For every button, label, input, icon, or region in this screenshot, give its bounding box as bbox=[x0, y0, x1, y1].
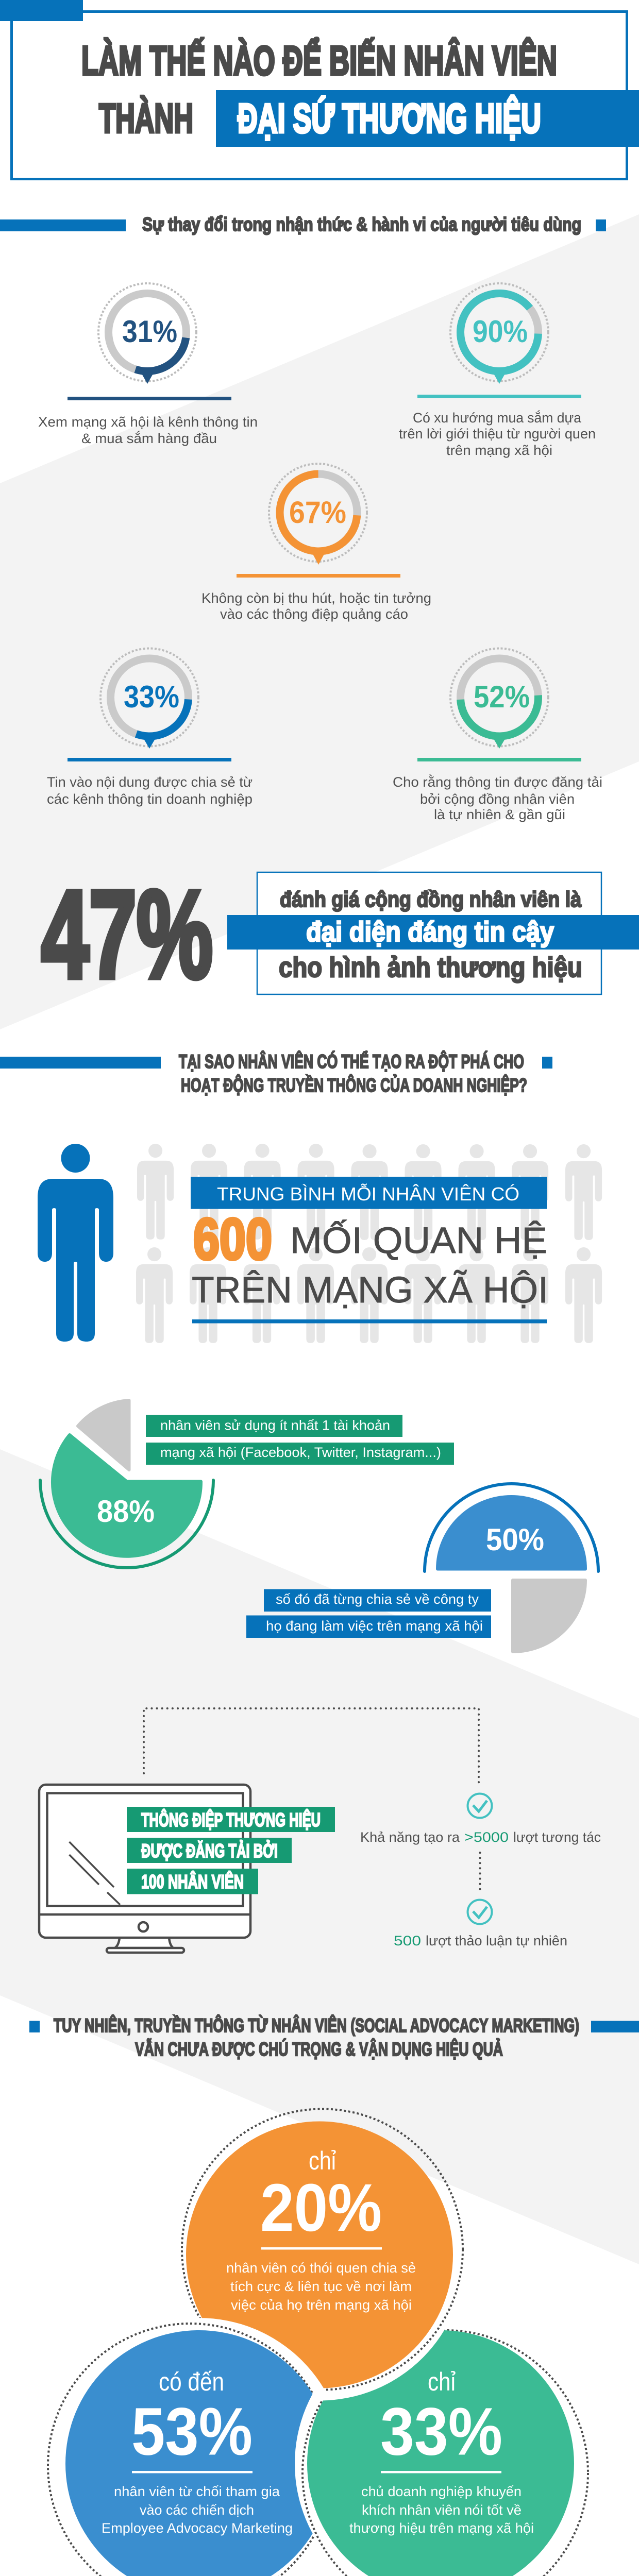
circle: 20%: nhân viên có thói quen chia sẻ bbox=[226, 2260, 416, 2276]
label: brand message: THÔNG ĐIỆP THƯƠNG HIỆU bbox=[141, 1809, 321, 1831]
label: brand message: ĐƯỢC ĐĂNG TẢI BỞI bbox=[141, 1840, 278, 1861]
circle: 33% bbox=[302, 2330, 588, 2576]
heading: why employees bbox=[0, 1050, 552, 1096]
gauge: 67%: vào các thông điệp quảng cáo bbox=[220, 606, 408, 622]
callout: 600 connections: 600 bbox=[193, 1207, 272, 1272]
label: 88% text: nhân viên sử dụng ít nhất 1 tài khoản bbox=[160, 1418, 390, 1433]
gauge: 67%: Không còn bị thu hút, hoặc tin tưởng bbox=[201, 590, 431, 606]
gauge: 90%: trên mạng xã hội bbox=[446, 443, 552, 458]
callout: 600 connections: TRUNG BÌNH MỖI NHÂN VIÊN CÓ bbox=[217, 1183, 519, 1205]
circle: 53%: có đến bbox=[159, 2367, 224, 2396]
circle: 33%: 33% bbox=[380, 2394, 502, 2469]
pie chart: 50%: 50% bbox=[486, 1522, 544, 1557]
circle: 33%: thương hiệu trên mạng xã hội bbox=[349, 2520, 534, 2536]
label: 50% text: họ đang làm việc trên mạng xã hội bbox=[266, 1618, 483, 1634]
people grid bbox=[136, 1144, 602, 1343]
circle: 20%: 20% bbox=[260, 2170, 382, 2245]
icon: check 1 bbox=[468, 1794, 492, 1818]
text: 500 discussions: 500 bbox=[394, 1933, 421, 1948]
callout: 47% bbox=[41, 865, 639, 1004]
label: 88% text bbox=[146, 1415, 454, 1465]
circle: 20%: việc của họ trên mạng xã hội bbox=[231, 2297, 412, 2313]
icon: check 2 bbox=[468, 1900, 492, 1924]
pie chart: 88% bbox=[40, 1400, 213, 1568]
heading: social advocacy: VẪN CHƯA ĐƯỢC CHÚ TRỌNG & VẬN DỤNG HIỆU QUẢ bbox=[135, 2038, 503, 2060]
circle: 33%: chủ doanh nghiệp khuyến bbox=[361, 2484, 522, 2499]
title: THÀNH bbox=[99, 95, 193, 141]
gauge: 33%: 33% bbox=[124, 680, 179, 714]
gauge: 31%: 31% bbox=[122, 314, 177, 349]
callout: 47%: đại diện đáng tin cậy bbox=[306, 916, 554, 947]
callout: 600 connections bbox=[191, 1177, 548, 1323]
gauge: 31%: Xem mạng xã hội là kênh thông tin bbox=[38, 414, 258, 430]
gauge: 67% bbox=[201, 464, 431, 622]
gauge: 52%: 52% bbox=[474, 680, 530, 714]
gauge: 67%: 67% bbox=[289, 495, 346, 530]
gauge: 90%: Có xu hướng mua sắm dựa bbox=[413, 410, 582, 426]
dotted connector bbox=[144, 1708, 479, 1783]
circle: 53%: 53% bbox=[131, 2394, 253, 2469]
label: 50% text bbox=[246, 1589, 491, 1638]
label: 50% text: số đó đã từng chia sẻ về công ty bbox=[276, 1591, 479, 1607]
callout: 47%: 47% bbox=[41, 865, 213, 1004]
gauge: 33%: Tin vào nội dung được chia sẻ từ bbox=[47, 774, 253, 790]
text: 5000 interactions: lượt tương tác bbox=[513, 1829, 601, 1845]
circle: 53%: nhân viên từ chối tham gia bbox=[114, 2484, 280, 2499]
circle: 33%: khích nhân viên nói tốt về bbox=[362, 2502, 522, 2518]
pie chart: 88%: 88% bbox=[97, 1494, 155, 1529]
gauge: 52%: là tự nhiên & gần gũi bbox=[434, 807, 565, 822]
text: 5000 interactions: Khả năng tạo ra bbox=[360, 1829, 460, 1845]
gauge: 33% bbox=[47, 648, 253, 807]
circle: 20%: tích cực & liên tục về nơi làm bbox=[230, 2279, 412, 2294]
gauge: 33%: các kênh thông tin doanh nghiệp bbox=[47, 791, 253, 807]
gauge: 52% bbox=[393, 648, 602, 822]
callout: 600 connections: TRÊN MẠNG XÃ HỘI bbox=[192, 1270, 548, 1311]
heading: social advocacy bbox=[29, 2014, 639, 2060]
callout: 47%: đánh giá cộng đồng nhân viên là bbox=[280, 887, 582, 912]
circle: 20% bbox=[182, 2109, 463, 2389]
label: brand message: 100 NHÂN VIÊN bbox=[141, 1871, 244, 1892]
dotted connector 2 bbox=[479, 1853, 481, 1892]
gauge: 90%: trên lời giới thiệu từ người quen bbox=[399, 426, 596, 442]
title bbox=[0, 0, 639, 179]
gauge: 52%: Cho rằng thông tin được đăng tải bbox=[393, 774, 602, 790]
circle: 53% bbox=[48, 2324, 332, 2576]
gauge: 31% bbox=[38, 283, 258, 446]
icon: blue person bbox=[38, 1144, 113, 1342]
gauge: 90% bbox=[399, 283, 596, 458]
circle: 53%: vào các chiến dịch bbox=[140, 2502, 254, 2518]
icon: monitor bbox=[39, 1785, 250, 1953]
circle: 33%: chỉ bbox=[428, 2367, 456, 2396]
text: 5000 interactions bbox=[360, 1829, 601, 1845]
pie chart: 50% bbox=[425, 1484, 598, 1652]
gauge: 90%: 90% bbox=[473, 314, 528, 349]
gauge: 31%: & mua sắm hàng đầu bbox=[81, 430, 217, 446]
label: brand message bbox=[127, 1807, 335, 1894]
text: 5000 interactions: >5000 bbox=[464, 1829, 509, 1845]
gauge: 52%: bởi cộng đồng nhân viên bbox=[420, 791, 575, 807]
circle: 53%: Employee Advocacy Marketing bbox=[102, 2520, 293, 2536]
callout: 600 connections: MỐI QUAN HỆ bbox=[290, 1220, 547, 1261]
circle: 20%: chỉ bbox=[309, 2146, 336, 2175]
text: 500 discussions: lượt thảo luận tự nhiên bbox=[426, 1933, 567, 1948]
label: 88% text: mạng xã hội (Facebook, Twitter, Instagram...) bbox=[160, 1445, 441, 1460]
callout: 47%: cho hình ảnh thương hiệu bbox=[279, 951, 582, 983]
